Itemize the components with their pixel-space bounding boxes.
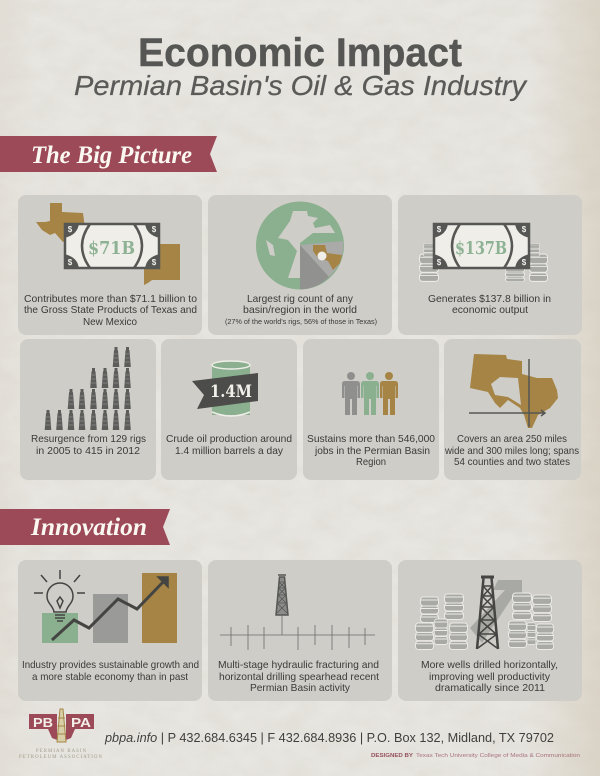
caption: 1.4 million barrels a day xyxy=(175,445,284,457)
panel: horizontal wells xyxy=(398,560,582,701)
panel: jobs xyxy=(303,339,439,480)
caption: (27% of the world's rigs, 56% of those in Texas) xyxy=(225,317,377,326)
caption: dramatically since 2011 xyxy=(435,682,545,694)
panel: crude oil production xyxy=(161,339,297,480)
icon: banknote $137B xyxy=(433,223,530,269)
panel: sustainable growth xyxy=(18,560,202,701)
caption: horizontal drilling spearhead recent xyxy=(219,671,379,683)
caption: 54 counties and two states xyxy=(454,456,570,468)
icon: banknote $137B: $ xyxy=(437,258,442,267)
panel: rig resurgence xyxy=(20,339,156,480)
caption: the Gross State Products of Texas and xyxy=(24,304,197,316)
designer credit: DESIGNED BY xyxy=(371,753,413,759)
icon: banknote $137B: $ xyxy=(437,225,442,234)
icon: banknote $71B: $ xyxy=(68,258,73,267)
icon: three people xyxy=(342,372,398,415)
section banner: Innovation xyxy=(0,509,170,545)
section banner: The Big Picture xyxy=(0,136,217,172)
icon: banknote $137B: $ xyxy=(522,225,527,234)
icon: banknote $71B: $ xyxy=(152,225,157,234)
caption xyxy=(225,293,377,326)
panel: 71 billion gross state product xyxy=(18,195,202,335)
caption: in 2005 to 415 in 2012 xyxy=(36,445,140,457)
footer contact line: pbpa.info | P 432.684.6345 | F 432.684.8936 | P.O. Box 132, Midland, TX 79702 xyxy=(104,731,554,745)
icon: barrels behind banknote xyxy=(420,244,548,282)
designer credit: Texas Tech University College of Media & Communication xyxy=(416,753,580,759)
chart: bars with rising arrow xyxy=(42,573,177,643)
subtitle: Permian Basin's Oil & Gas Industry xyxy=(74,70,528,101)
logo: PBPA: PA xyxy=(71,715,92,730)
icon: rows of rigs growing xyxy=(45,347,131,430)
icon: barrel stacks xyxy=(415,593,554,650)
logo: PBPA: PERMIAN BASIN xyxy=(36,749,87,754)
caption: Largest rig count of any xyxy=(247,293,354,305)
icon: barrel with 1.4M ribbon: 1.4M xyxy=(210,382,252,402)
caption xyxy=(166,433,292,457)
caption xyxy=(31,433,146,457)
logo: PBPA: PB xyxy=(33,715,53,730)
panel: hydraulic fracturing xyxy=(208,560,392,701)
caption: a more stable economy than in past xyxy=(32,671,188,683)
caption: More wells drilled horizontally, xyxy=(421,659,558,671)
caption: Region xyxy=(356,456,386,468)
caption xyxy=(307,433,435,468)
caption: Permian Basin activity xyxy=(250,682,351,694)
caption: Contributes more than $71.1 billion to xyxy=(24,293,197,305)
caption: Covers an area 250 miles xyxy=(457,433,567,445)
icon: derrick with horizontal well xyxy=(220,575,375,650)
icon: banknote $71B xyxy=(64,223,160,269)
logo: PBPA xyxy=(19,709,103,760)
caption xyxy=(421,659,558,694)
logo: PBPA: PETROLEUM ASSOCIATION xyxy=(19,755,103,760)
caption xyxy=(428,293,551,316)
caption: Sustains more than 546,000 xyxy=(307,433,435,445)
icon: Texas and New Mexico behind banknote xyxy=(36,203,180,285)
caption: basin/region in the world xyxy=(243,304,357,316)
section banner: The Big Picture: The Big Picture xyxy=(31,142,192,169)
panel: largest rig count xyxy=(208,195,392,335)
icon: map of basin with axes xyxy=(469,354,558,428)
caption: Crude oil production around xyxy=(166,433,292,445)
section banner: Innovation: Innovation xyxy=(30,514,147,541)
panel: area covered xyxy=(444,339,581,480)
arrow: rising grey arrow xyxy=(470,580,522,643)
caption xyxy=(444,433,579,468)
icon: globe xyxy=(256,202,344,290)
caption: improving well productivity xyxy=(429,671,551,683)
icon: banknote $71B: $ xyxy=(152,258,157,267)
caption: jobs in the Permian Basin xyxy=(314,445,430,457)
icon: barrel with 1.4M ribbon xyxy=(192,361,258,416)
icon: banknote $71B: $71B xyxy=(88,238,135,259)
caption xyxy=(218,659,379,694)
title: Economic Impact xyxy=(138,31,462,75)
icon: banknote $71B: $ xyxy=(68,225,73,234)
icon: banknote $137B: $ xyxy=(522,258,527,267)
caption: Industry provides sustainable growth and xyxy=(22,659,199,671)
icon: banknote $137B: $137B xyxy=(455,238,507,259)
caption: Resurgence from 129 rigs xyxy=(31,433,146,445)
caption xyxy=(24,293,197,328)
icon: light bulb xyxy=(34,570,85,621)
icon: large derrick xyxy=(477,577,498,649)
caption: economic output xyxy=(452,304,528,316)
caption: Generates $137.8 billion in xyxy=(428,293,551,305)
caption xyxy=(22,659,199,683)
caption: Multi-stage hydraulic fracturing and xyxy=(218,659,379,671)
caption: wide and 300 miles long; spans xyxy=(444,445,579,457)
caption: New Mexico xyxy=(83,316,137,328)
panel: 137 billion economic output xyxy=(398,195,582,335)
